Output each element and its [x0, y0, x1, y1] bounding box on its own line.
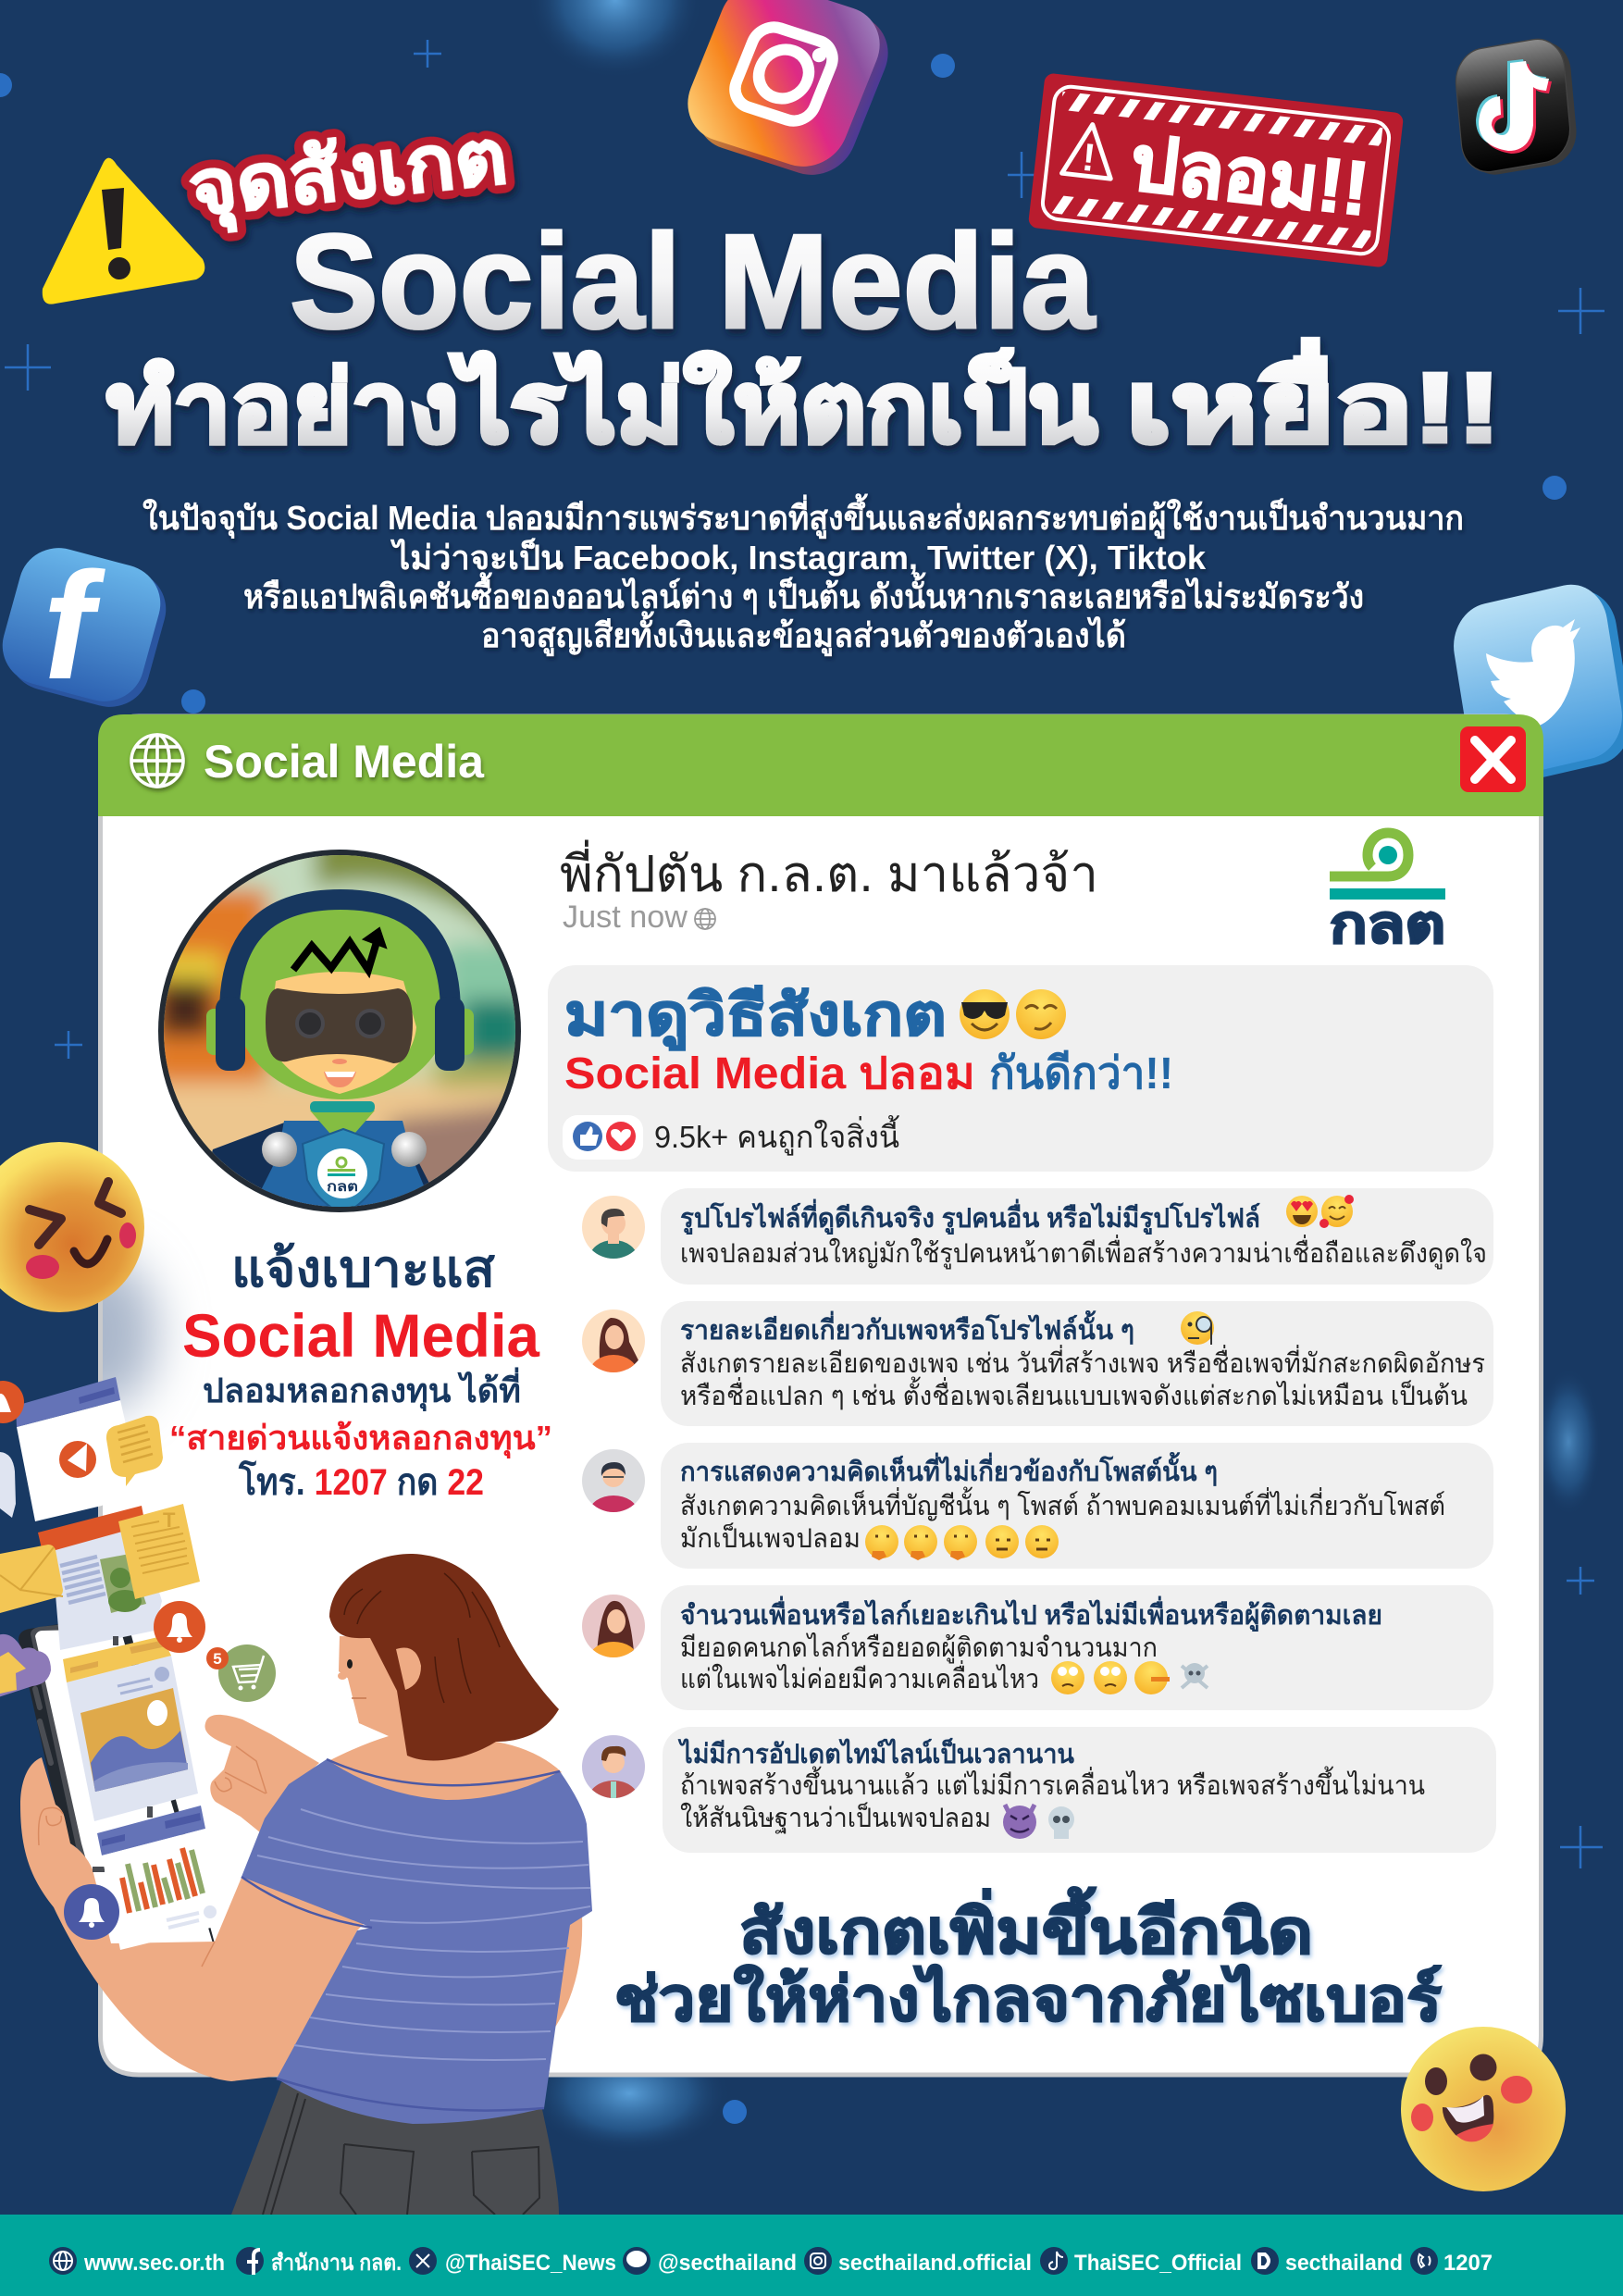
closing message: สังเกตเพิ่มขึ้นอีกนิด: [739, 1886, 1313, 1966]
badge: ปลอม!!: !: [1080, 135, 1097, 180]
title: ทำอย่างไรไม่ให้ตกเป็น: [106, 349, 1097, 463]
post subheading: Social Media ปลอม: [564, 1049, 975, 1098]
title: เหยื่อ!!: [1126, 339, 1501, 463]
avatar helmet: [206, 900, 474, 1099]
app card: image post: [63, 1636, 198, 1821]
post bubble: [548, 965, 1493, 1172]
comment 2: สังเกตรายละเอียดของเพจ เช่น วันที่สร้างเพจ หรือชื่อเพจที่มักสะกดผิดอักษร: [680, 1345, 1485, 1379]
icon: cloud upload: [0, 1634, 51, 1698]
icon: shopping cart: 5: [213, 1650, 222, 1668]
title: Social Media: [290, 206, 1096, 356]
illustration: woman with phone: [0, 1377, 592, 2215]
report hotline: ปลอมหลอกลงทุน ได้ที่: [203, 1367, 521, 1412]
avatar cape and body: [212, 1101, 429, 1207]
emoji: sunglasses: [960, 989, 1010, 1039]
footer contact icons: [49, 2247, 1438, 2275]
like counter: [563, 1115, 900, 1160]
comment 3: มักเป็นเพจปลอม: [680, 1521, 861, 1554]
avatar shield: กลต: [327, 1179, 358, 1195]
intro paragraph: ในปัจจุบัน Social Media ปลอมมีการแพร่ระบาดที่สูงขึ้นและส่งผลกระทบต่อผู้ใช้งานเป็นจำนวนมาก: [142, 493, 1464, 540]
comment 3: [578, 1443, 1493, 1569]
footer: [0, 2215, 1623, 2296]
app card: article: T: [163, 1508, 176, 1532]
avatar: man in teal: [582, 1196, 645, 1259]
report hotline: แจ้งเบาะแส: [231, 1239, 496, 1297]
comment 1: รูปโปรไฟล์ที่ดูดีเกินจริง รูปคนอื่น หรือไม่มีรูปโปรไฟล์: [680, 1198, 1260, 1235]
phone body: [19, 1623, 215, 1949]
intro paragraph: หรือแอปพลิเคชันซื้อของออนไลน์ต่าง ๆ เป็นต้น ดังนั้นหากเราละเลยหรือไม่ระมัดระวัง: [243, 572, 1364, 615]
emoji: eye roll and skull: [1051, 1661, 1208, 1694]
footer contact text: secthailand: [1285, 2251, 1403, 2276]
intro paragraph: ไม่ว่าจะเป็น Facebook, Instagram, Twitter (X), Tiktok: [390, 537, 1207, 577]
comment 3: สังเกตความคิดเห็นที่บัญชีนั้น ๆ โพสต์ ถ้าพบคอมเมนต์ที่ไม่เกี่ยวกับโพสต์: [680, 1486, 1445, 1521]
emoji: happy face: [1401, 2027, 1566, 2191]
emoji: heart eyes: [1286, 1195, 1354, 1228]
report hotline: [169, 1239, 552, 1503]
report hotline: “สายด่วนแจ้งหลอกลงทุน”: [169, 1419, 552, 1459]
panel header: [98, 714, 1543, 816]
profile avatar: [158, 850, 521, 1212]
post heading: มาดูวิธีสังเกต: [564, 984, 947, 1050]
close button: [1460, 726, 1526, 792]
hair: [329, 1554, 559, 1760]
header title: Social Media: [204, 736, 485, 788]
emoji: smirk: [1016, 989, 1066, 1039]
badge: ปลอม!!: [1028, 72, 1404, 268]
footer contact text: สำนักงาน กลต.: [271, 2251, 402, 2276]
avatar: woman in orange: [582, 1309, 645, 1372]
footer contact text: www.sec.or.th: [83, 2251, 225, 2276]
closing message: ช่วยให้ห่างไกลจากภัยไซเบอร์: [614, 1963, 1442, 2033]
badge: จุดสังเกต: จุดสังเกต: [185, 115, 512, 236]
back arm: [527, 1916, 582, 2064]
face: [339, 1636, 412, 1740]
icon: tiktok: [1453, 34, 1579, 179]
footer icon glyphs: [54, 2250, 1431, 2275]
footer contact text: ThaiSEC_Official: [1074, 2251, 1242, 2276]
icon: instagram: [675, 0, 900, 185]
report hotline: โทร. 1207 กด 22: [238, 1460, 484, 1503]
footer contact text: @ThaiSEC_News: [445, 2251, 616, 2276]
footer contact text: 1207: [1443, 2251, 1493, 2276]
intro paragraph: อาจสูญเสียทั้งเงินและข้อมูลส่วนตัวของตัวเองได้: [481, 611, 1126, 657]
avatar shield: [303, 1129, 384, 1214]
panel: browser window: [98, 714, 1543, 2075]
icon: orange bell: [154, 1601, 205, 1653]
comment 3: การแสดงความคิดเห็นที่ไม่เกี่ยวข้องกับโพสต์นั้น ๆ: [680, 1451, 1218, 1487]
app card: article: [0, 1504, 200, 1650]
comment 4: แต่ในเพจไม่ค่อยมีความเคลื่อนไหว: [680, 1660, 1039, 1694]
report hotline: Social Media: [182, 1301, 540, 1370]
icon: facebook: f: [29, 540, 111, 712]
comment 5: ให้สันนิษฐานว่าเป็นเพจปลอม: [680, 1801, 991, 1834]
comment 5: ถ้าเพจสร้างขึ้นนานแล้ว แต่ไม่มีการเคลื่อนไหว หรือเพจสร้างขึ้นไม่นาน: [680, 1766, 1425, 1801]
post subheading: [564, 1049, 1173, 1098]
icon: navy bell: [64, 1884, 119, 1940]
app card: bar chart: [97, 1806, 217, 1950]
logo: SEC: กลต: [1330, 895, 1445, 953]
comment 1: เพจปลอมส่วนใหญ่มักใช้รูปคนหน้าตาดีเพื่อสร้างความน่าเชื่อถือและดึงดูดใจ: [680, 1235, 1487, 1270]
badge: ปลอม!!: ปลอม!!: [1126, 121, 1373, 231]
avatar: man with glasses: [582, 1449, 645, 1512]
eye and mouth: [338, 1659, 366, 1698]
icon: shopping cart: [206, 1644, 276, 1702]
comment 4: มียอดคนกดไลก์หรือยอดผู้ติดตามจำนวนมาก: [680, 1632, 1158, 1664]
post time: Just now: [563, 900, 688, 935]
background glows: [527, 0, 1602, 2153]
post subheading: กันดีกว่า!!: [989, 1049, 1173, 1098]
pants: [231, 2082, 559, 2215]
comment 4: จำนวนเพื่อนหรือไลก์เยอะเกินไป หรือไม่มีเพื่อนหรือผู้ติดตามเลย: [680, 1595, 1382, 1632]
ear: [396, 1647, 421, 1690]
app connectors: [93, 1636, 150, 1869]
comment 2: หรือชื่อแปลก ๆ เช่น ตั้งชื่อเพจเลียนแบบเพจดังแต่สะกดไม่เหมือน เป็นต้น: [680, 1376, 1468, 1411]
emoji: laughing face: [0, 1142, 144, 1312]
comment 2: [578, 1301, 1493, 1426]
title: [106, 206, 1501, 463]
comment 4: [578, 1585, 1493, 1710]
shadow beside card: [103, 1244, 185, 1423]
bell badge orange: [0, 1381, 24, 1423]
comment 5: [578, 1727, 1496, 1853]
icon: warning triangle: [43, 158, 204, 304]
holding arm and hand: [20, 1757, 372, 2081]
profile name: พี่กัปตัน ก.ล.ต. มาแล้วจ้า: [560, 839, 1098, 902]
pointing hand: [204, 1715, 319, 1832]
closing message: [614, 1886, 1442, 2033]
avatar: woman in yellow: [582, 1595, 645, 1657]
icon: facebook: [0, 539, 175, 716]
footer contact text: [83, 2251, 1493, 2276]
comment 2: รายละเอียดเกี่ยวกับเพจหรือโปรไฟล์นั้น ๆ: [680, 1309, 1134, 1346]
icon: globe: [131, 735, 183, 787]
avatar: man in red jacket: [582, 1735, 645, 1798]
comment 5: ไม่มีการอัปเดตไทม์ไลน์เป็นเวลานาน: [677, 1737, 1074, 1769]
badge: จุดสังเกต: จุดสังเกต: [185, 115, 512, 236]
footer contact text: secthailand.official: [838, 2251, 1032, 2276]
logo: SEC: [1330, 833, 1445, 953]
like counter: 9.5k+ คนถูกใจสิ่งนี้: [654, 1115, 900, 1156]
intro paragraph: [142, 493, 1464, 657]
shirt: [242, 1759, 592, 2124]
neck and shoulders: [327, 1666, 562, 1801]
emoji: devil and skull: [1003, 1805, 1074, 1839]
emoji: monocle: [1181, 1311, 1214, 1345]
app card: video: [0, 1377, 163, 1521]
icon: twitter: [1447, 577, 1623, 790]
emoji: thinking faces: [865, 1525, 1059, 1560]
footer contact text: @secthailand: [658, 2251, 797, 2276]
comment 1: [578, 1188, 1493, 1285]
